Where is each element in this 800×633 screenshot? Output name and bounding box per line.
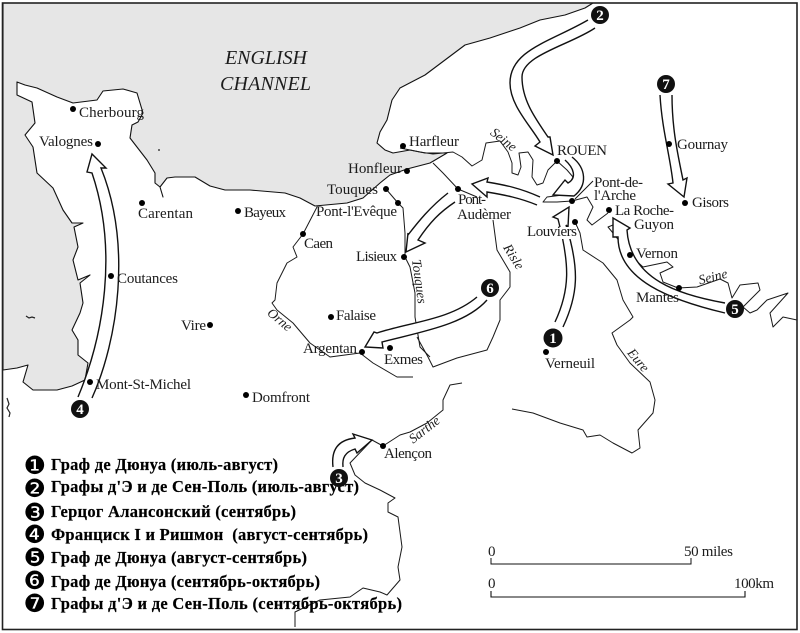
- legend item 2: [24, 474, 359, 503]
- marker 5: [726, 300, 744, 318]
- marker 3: 3: [335, 471, 343, 487]
- arrow 5: [613, 218, 725, 313]
- town: Mont-St-Michel: Mont-St-Michel: [96, 377, 191, 393]
- town: Vire: Vire: [181, 318, 206, 334]
- town: Gournay: Gournay: [677, 137, 728, 153]
- sea label: CHANNEL: [220, 73, 311, 95]
- label: Risle: Risle: [500, 240, 527, 272]
- legend item 5: ❺: [24, 543, 46, 572]
- town: Pont-de-l'Arche: [569, 175, 643, 204]
- legend item 6: [24, 566, 320, 595]
- town: Alencon: Alençon: [384, 446, 432, 462]
- river: Orne: [272, 207, 413, 377]
- marker 4: [71, 400, 89, 418]
- arrow 2: to Pont-Audemer: [472, 178, 540, 205]
- town: La Roche-Guyon: Guyon: [634, 217, 674, 233]
- legend item 7: ❼: [24, 589, 46, 618]
- arrow 2: to Lisieux: [406, 193, 455, 252]
- arrow 1: [553, 207, 575, 327]
- arrow 6: [365, 297, 487, 348]
- town: Louviers: Louviers: [527, 224, 577, 240]
- scale bars: [488, 544, 774, 597]
- label: Seine south: Seine: [697, 266, 729, 287]
- legend item 4: [24, 520, 368, 549]
- town: Pont-l'Eveque: Pont-l'Evêque: [316, 204, 397, 220]
- label: Touques: Touques: [409, 258, 430, 304]
- legend item 5: [24, 543, 307, 572]
- town: Carentan: Carentan: [138, 206, 194, 222]
- marker 1: [544, 328, 562, 348]
- marker 7: [657, 75, 675, 93]
- town: Pont-Audemer: Pont-: [458, 192, 486, 208]
- legend item 1: Граф де Дюнуа (июль-август): [51, 455, 278, 474]
- sea label: ENGLISH: [224, 47, 309, 69]
- sea: English Channel: [3, 3, 593, 390]
- scale: miles: [488, 544, 733, 564]
- marker 1: 1: [549, 331, 557, 347]
- town: La Roche-Guyon: La Roche-: [615, 203, 674, 219]
- river labels: [264, 125, 729, 446]
- legend item 1: [24, 451, 278, 480]
- numbered route markers: [71, 6, 744, 487]
- legend item 2: ❷: [24, 474, 46, 503]
- town: Exmes: [384, 345, 423, 368]
- legend item 6: ❻: [24, 566, 46, 595]
- islands and coast fragments: [7, 150, 160, 417]
- scale: kilometres: [488, 576, 774, 597]
- river: Touques: [386, 189, 430, 357]
- arrow 3: [333, 434, 372, 467]
- town: Domfront: Domfront: [252, 390, 311, 406]
- town: Verneuil: [543, 349, 595, 372]
- town: Pont-Audemer: [455, 186, 511, 223]
- arrow 4: [78, 154, 119, 398]
- legend item 3: [24, 498, 296, 527]
- town: Falaise: Falaise: [336, 308, 376, 324]
- town: Vernon: Vernon: [636, 246, 678, 262]
- legend item 7: Графы д'Э и де Сен-Поль (сентябрь-октябрь): [51, 594, 402, 613]
- marker 5: 5: [731, 302, 739, 318]
- town: Mantes: Mantes: [636, 290, 679, 306]
- legend item 3: Герцог Алансонский (сентябрь): [51, 502, 296, 521]
- arrow 2: [510, 20, 595, 155]
- legend item 2: Графы д'Э и де Сен-Поль (июль-август): [51, 477, 359, 496]
- town: Rouen: ROUEN: [557, 143, 607, 159]
- marker 2: 2: [596, 8, 604, 24]
- town: Touques: Touques: [327, 182, 378, 198]
- river: Eure: [512, 222, 655, 453]
- town: Harfleur: Harfleur: [409, 134, 459, 150]
- town: Gisors: Gisors: [692, 195, 729, 211]
- sea label: [220, 47, 311, 95]
- marker 4: 4: [76, 402, 84, 418]
- town: Bayeux: Bayeux: [244, 205, 286, 221]
- label: Sarthe: Sarthe: [406, 413, 443, 446]
- town: Exmes: Exmes: [384, 352, 423, 368]
- town: Pont-de-l'Arche: l'Arche: [594, 188, 636, 204]
- scale: kilometres: 0: [488, 576, 496, 592]
- town: Pont-de-l'Arche: Pont-de-: [594, 175, 643, 191]
- scale: kilometres: 100km: [734, 576, 774, 592]
- marker 3: [330, 469, 348, 487]
- scale: miles: 50 miles: [684, 544, 733, 560]
- towns: [39, 105, 729, 462]
- marker 2: [591, 6, 609, 24]
- marker 7: 7: [662, 77, 670, 93]
- town: Verneuil: Verneuil: [545, 356, 595, 372]
- legend item 1: ❶: [24, 451, 46, 480]
- town: Cherbourg: Cherbourg: [79, 105, 144, 121]
- legend item 4: ❹: [24, 520, 46, 549]
- scale: miles: 0: [488, 544, 496, 560]
- arrow 7: [660, 95, 687, 197]
- town: Coutances: Coutances: [117, 271, 178, 287]
- arrow 2: loop past Rouen: [553, 157, 584, 196]
- legend item 7: [24, 589, 402, 618]
- marker 6: [481, 279, 499, 297]
- legend item 3: ❸: [24, 498, 46, 527]
- town: Argentan: Argentan: [303, 341, 358, 357]
- label: Eure: Eure: [624, 345, 652, 375]
- rivers: [272, 141, 797, 627]
- legend item 4: Франциск I и Ришмон (август-сентябрь): [51, 525, 368, 544]
- label: Orne: Orne: [264, 305, 295, 334]
- label: Seine north: Seine: [488, 125, 520, 154]
- river: Risle: [417, 163, 510, 367]
- marker 6: 6: [486, 281, 494, 297]
- river: Sarthe: [295, 383, 462, 627]
- town: Caen: Caen: [304, 236, 334, 252]
- river: Seine: [400, 141, 797, 327]
- legend: [24, 451, 402, 618]
- town: Valognes: Valognes: [39, 134, 93, 150]
- legend item 6: Граф де Дюнуа (сентябрь-октябрь): [51, 572, 320, 591]
- legend item 5: Граф де Дюнуа (август-сентябрь): [51, 548, 307, 567]
- town: Pont-Audemer: Audèmer: [457, 207, 511, 223]
- route arrows: [78, 20, 725, 467]
- town: La Roche-Guyon: [606, 203, 674, 233]
- town: Lisieux: Lisieux: [356, 249, 398, 265]
- town: Caen: [300, 231, 334, 252]
- town: Honfleur: Honfleur: [348, 161, 402, 177]
